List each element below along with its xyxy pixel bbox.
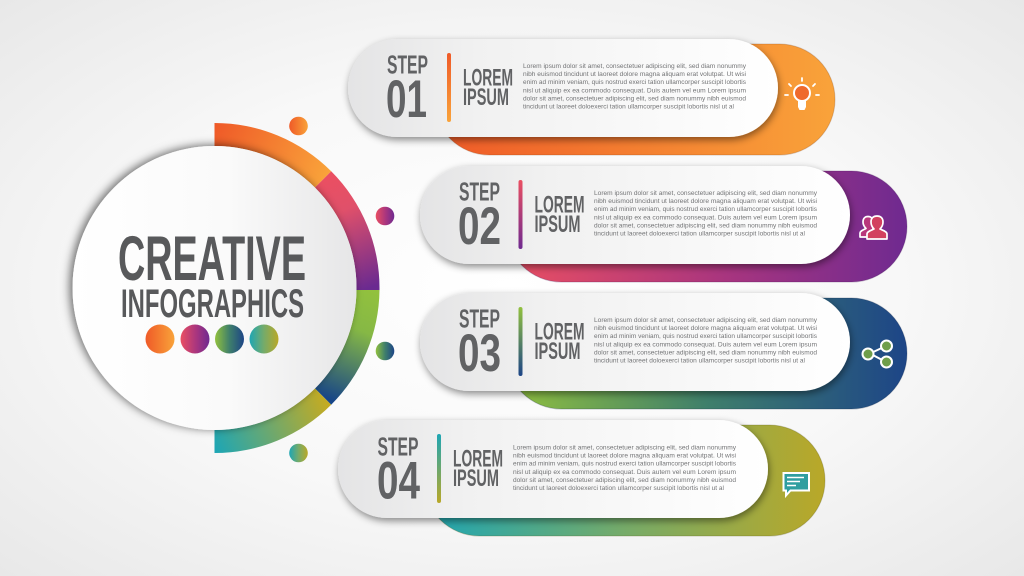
body text: dolor sit amet, consectetuer adipiscing elit, sed diam nonummy nibh euismod: [594, 349, 817, 356]
step number: 02: [458, 197, 501, 256]
body text: nisl ut aliquip ex ea commodo consequat. Duis autem vel eum Lorem ipsum: [594, 341, 817, 348]
satellite dot: green: [376, 342, 394, 360]
white pill: [420, 166, 850, 264]
white pill: [338, 420, 768, 518]
colour dot: teal: [250, 324, 278, 354]
heading: LOREM: [534, 318, 584, 346]
body text: nibh euismod tincidunt ut laoreet dolore magna aliquam erat volutpat. Ut wisi: [594, 325, 817, 332]
body text: [594, 190, 818, 238]
icon: share: [862, 340, 892, 368]
accent bar: [447, 53, 451, 122]
panel: step 01: [348, 39, 835, 155]
body text: dolor sit amet, consectetuer adipiscing elit, sed diam nonummy nibh euismod: [523, 95, 746, 102]
panel: step 02: [420, 166, 907, 282]
body text: Lorem ipsum dolor sit amet, consectetuer adipiscing elit, sed diam nonummy: [523, 63, 747, 70]
body text: Lorem ipsum dolor sit amet, consectetuer adipiscing elit, sed diam nonummy: [513, 444, 737, 452]
body text: nibh euismod tincidunt ut laoreet dolore magna aliquam erat volutpat. Ut wisi: [594, 198, 817, 205]
body text: tincidunt ut laoreet doloexerci tation ullamcorper suscipit lobortis nisl ut al: [523, 104, 734, 110]
heading: IPSUM: [453, 465, 499, 492]
heading: IPSUM: [534, 211, 580, 238]
body text: enim ad minim veniam, quis nostrud exerci tation ullamcorper suscipit lobortis: [513, 461, 737, 468]
step label: STEP: [459, 306, 500, 334]
white pill: [420, 293, 850, 391]
ring segment: red to purple: [315, 171, 380, 290]
ring segment: orange: [214, 123, 331, 188]
body text: dolor sit amet, consectetuer adipiscing elit, sed diam nonummy nibh euismod: [594, 222, 817, 229]
body text: [594, 317, 818, 364]
step number: 03: [458, 324, 501, 383]
heading: IPSUM: [463, 84, 509, 111]
accent bar: [437, 434, 441, 503]
body text: [513, 444, 737, 492]
step label: STEP: [459, 178, 500, 206]
body text: enim ad minim veniam, quis nostrud exerci tation ullamcorper suscipit lobortis: [594, 206, 818, 213]
body text: nisl ut aliquip ex ea commodo consequat. Duis autem vel eum Lorem ipsum: [523, 87, 746, 94]
step label: STEP: [387, 52, 428, 80]
body text: Lorem ipsum dolor sit amet, consectetuer adipiscing elit, sed diam nonummy: [594, 317, 818, 324]
icon: light bulb: [785, 78, 819, 110]
accent bar: [518, 180, 522, 249]
white pill: [348, 39, 778, 137]
title: infographics: INFOGRAPHICS: [121, 282, 304, 326]
heading: [534, 192, 584, 238]
body text: enim ad minim veniam, quis nostrud exerci tation ullamcorper suscipit lobortis: [594, 333, 818, 340]
step label: STEP: [378, 434, 418, 462]
white disc: [72, 146, 356, 430]
colour dot: green: [215, 324, 244, 354]
title: creative: CREATIVE: [118, 224, 306, 294]
body text: [523, 63, 747, 110]
panel: step 04: [338, 420, 825, 536]
hub: creative infographics circle: [72, 123, 380, 453]
body text: dolor sit amet, consectetuer adipiscing elit, sed diam nonummy nibh euismod: [513, 477, 736, 484]
ring segment: gold to teal: [214, 388, 331, 453]
heading: IPSUM: [534, 338, 580, 365]
body text: Lorem ipsum dolor sit amet, consectetuer adipiscing elit, sed diam nonummy: [594, 190, 818, 197]
icon: chat bubble: [784, 473, 809, 496]
icon: users: [860, 216, 887, 239]
step number: 04: [377, 452, 420, 510]
heading: [534, 318, 584, 365]
satellite dot: orange: [289, 117, 308, 135]
heading: LOREM: [453, 446, 503, 472]
body text: nibh euismod tincidunt ut laoreet dolore magna aliquam erat volutpat. Ut wisi: [523, 71, 746, 78]
heading: LOREM: [463, 64, 513, 92]
body text: nisl ut aliquip ex ea commodo consequat. Duis autem vel eum Lorem ipsum: [594, 214, 817, 221]
panel: step 03: [420, 293, 907, 409]
body text: tincidunt ut laoreet doloexerci tation ullamcorper suscipit lobortis nisl ut al: [594, 358, 805, 364]
satellite dot: magenta: [376, 207, 394, 225]
coloured backing band: [424, 425, 825, 536]
ring segment: green to navy: [315, 290, 380, 405]
coloured backing band: [506, 298, 907, 409]
body text: tincidunt ut laoreet doloexerci tation ullamcorper suscipit lobortis nisl ut al: [594, 230, 805, 238]
coloured backing band: [434, 44, 835, 155]
colour dot: magenta: [180, 324, 210, 354]
accent bar: [518, 307, 522, 376]
coloured backing band: [506, 171, 907, 282]
body text: nisl ut aliquip ex ea commodo consequat. Duis autem vel eum Lorem ipsum: [513, 469, 736, 476]
body text: tincidunt ut laoreet doloexerci tation ullamcorper suscipit lobortis nisl ut al: [513, 485, 724, 492]
heading: LOREM: [534, 192, 584, 218]
step number: 01: [386, 70, 427, 129]
heading: [463, 64, 513, 111]
body text: nibh euismod tincidunt ut laoreet dolore magna aliquam erat volutpat. Ut wisi: [513, 453, 736, 460]
satellite dot: teal: [289, 444, 308, 462]
heading: [453, 446, 503, 492]
body text: enim ad minim veniam, quis nostrud exerci tation ullamcorper suscipit lobortis: [523, 79, 747, 86]
colour dot: orange: [146, 324, 174, 354]
